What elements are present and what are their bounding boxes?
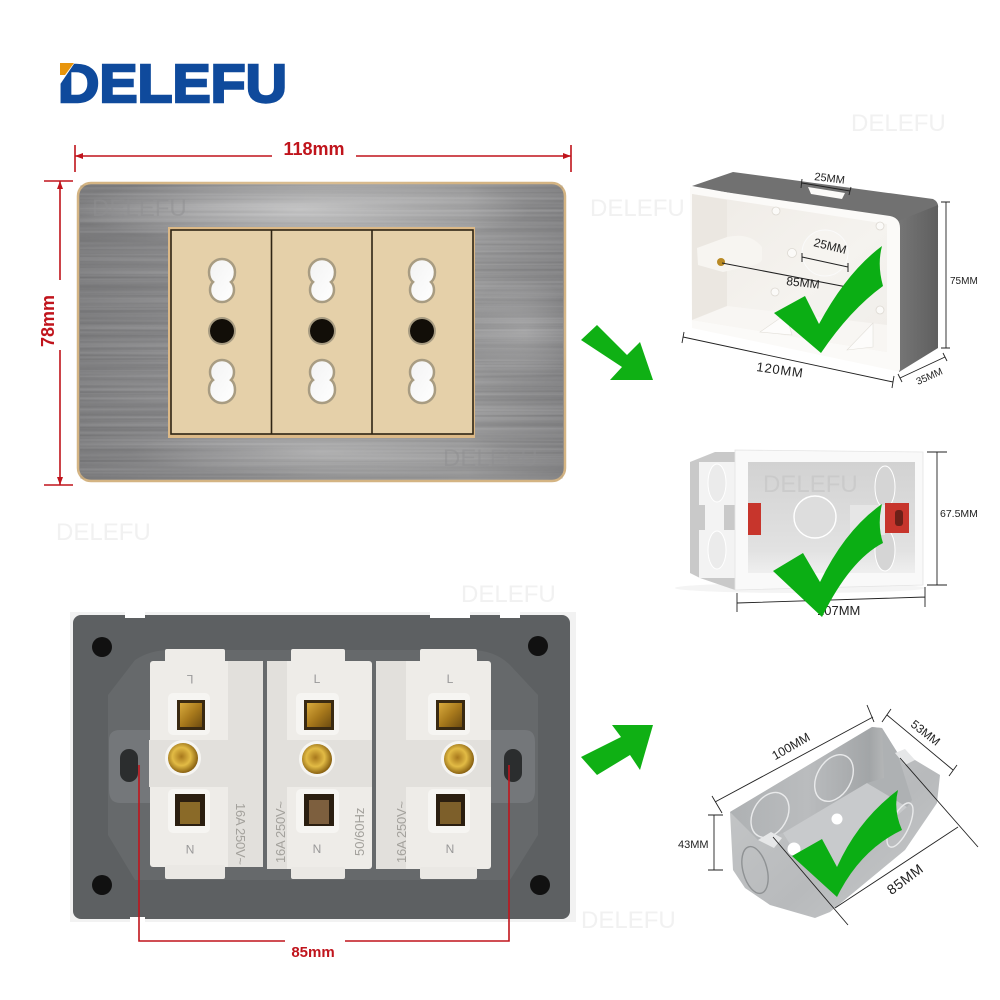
flanges — [758, 749, 915, 848]
module 3: N — [446, 842, 454, 856]
box interior — [692, 194, 887, 352]
watermarks: DELEFU — [590, 195, 685, 222]
module 2: L — [314, 672, 321, 686]
box 1 labels: 120MM — [756, 359, 805, 381]
front socket plate: DELEFU — [92, 195, 187, 222]
mounting box 2: white box with red terminals: DELEFU — [763, 471, 858, 498]
socket 1 — [208, 259, 236, 403]
module 3: L — [447, 672, 454, 686]
box 3 labels — [678, 705, 978, 925]
watermarks — [56, 110, 946, 934]
box 3 labels: 53MM — [908, 717, 943, 749]
brushed steel frame — [78, 183, 565, 481]
floor holes — [788, 814, 842, 856]
rear socket body — [70, 612, 576, 922]
knockouts — [737, 748, 918, 896]
cream socket panel — [168, 227, 475, 438]
box 1 labels: 35MM — [915, 366, 945, 388]
box 2 labels — [737, 452, 978, 618]
rear dimension: 85mm — [139, 765, 509, 961]
logo: DELEFU: DELEFU — [58, 54, 287, 114]
box 1 labels: 25MM — [812, 235, 848, 257]
box outline — [730, 727, 940, 918]
check mark: box 3 — [792, 790, 902, 897]
clips — [125, 612, 520, 922]
watermarks: DELEFU — [56, 519, 151, 546]
mounting box 3: metal box — [678, 705, 978, 925]
right inner wall — [867, 728, 912, 807]
box 3 labels: 43MM — [678, 839, 709, 851]
box 1 labels: 25MM — [814, 171, 845, 187]
box mounting post — [697, 236, 762, 272]
box 3 labels: 85MM — [884, 860, 926, 898]
box top face — [692, 172, 938, 224]
box 3 labels: 100MM — [769, 730, 813, 763]
front socket plate — [70, 174, 580, 481]
module 2 — [267, 649, 372, 879]
box front rim — [735, 450, 923, 590]
white plate edge — [70, 612, 576, 922]
box left side — [690, 452, 735, 590]
box knockouts — [794, 496, 836, 538]
box 2 labels: 67.5MM — [940, 508, 978, 520]
module 2: 50/60Hz — [352, 808, 367, 856]
arrow: bottom green — [581, 725, 653, 775]
front plate dimension: 118mm: 118mm — [283, 139, 345, 159]
box knockouts — [802, 230, 848, 276]
grey back frame — [73, 615, 570, 919]
box front rim — [690, 187, 900, 371]
mounting box 1: rectangular white box — [682, 171, 978, 388]
module 1 — [149, 649, 263, 879]
floor — [783, 783, 907, 868]
box slot — [808, 187, 845, 199]
logo accent — [60, 63, 74, 75]
box interior — [748, 462, 915, 573]
mounting holes — [92, 636, 550, 895]
ground shadow — [675, 583, 925, 593]
check mark: box 2 — [773, 504, 883, 617]
back wall — [730, 727, 885, 840]
watermarks: DELEFU — [443, 445, 538, 472]
module 2: N — [313, 842, 321, 856]
socket 2 — [308, 259, 336, 403]
arrow: top green — [581, 325, 653, 380]
front plate dimension: 118mm — [75, 139, 571, 172]
front plate dimension: 78mm: 78mm — [38, 295, 58, 347]
box 1 labels: 85MM — [786, 274, 820, 291]
red terminal right — [885, 503, 909, 533]
module 1: N — [186, 842, 194, 856]
box 1 labels: 75MM — [950, 276, 978, 287]
mounting slots — [109, 730, 535, 803]
module 1: 16A 250V~ — [233, 803, 248, 865]
box wedges — [760, 314, 873, 350]
front plate dimension: 78mm — [38, 181, 73, 485]
check mark: box 1 — [774, 246, 883, 353]
box right face — [896, 205, 938, 372]
mounting box 2: white box with red terminals — [675, 450, 978, 618]
module 3 — [376, 649, 491, 879]
red terminal left — [748, 503, 761, 535]
module 2: 16A 250V~ — [273, 801, 288, 863]
module 1: L — [186, 672, 193, 686]
socket 3 — [408, 259, 436, 403]
front socket plate: DELEFU — [443, 445, 538, 472]
watermarks: DELEFU — [851, 110, 946, 137]
watermarks: DELEFU — [581, 907, 676, 934]
box 2 labels: 107MM — [817, 603, 860, 618]
module 3: 16A 250V~ — [394, 801, 409, 863]
watermarks: DELEFU — [461, 581, 556, 608]
rear dimension: 85mm: 85mm — [291, 944, 335, 961]
box 1 labels — [682, 171, 978, 388]
